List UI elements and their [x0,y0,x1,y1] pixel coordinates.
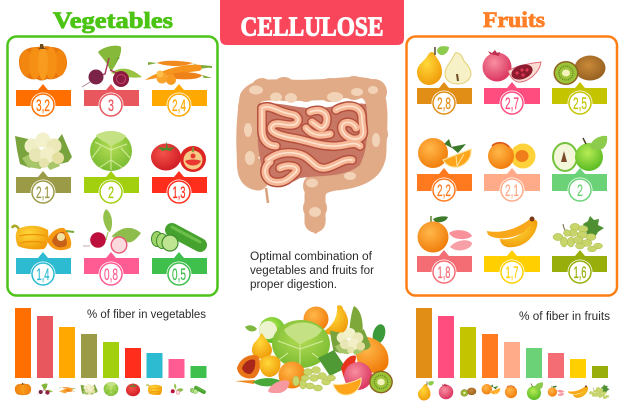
icon: carrot [145,61,213,85]
label: kiwi 2,5: 2,5 [573,94,587,113]
label: pomegranate 2,7 [484,82,540,116]
icon: pumpkin [19,44,67,80]
icon: apple [553,136,607,171]
icon: radish [83,209,141,253]
icon: pomegranate [482,50,541,82]
label: cucumber 0,5 [152,252,207,286]
icon: pear [417,46,471,85]
heading: cellulose: CELLULOSE [240,12,384,42]
bar chart: fruits [416,308,608,378]
label: peach 2,1 [484,168,540,202]
illustration: intestines [237,76,388,234]
text: description [250,251,374,291]
icon: grapes [553,216,604,252]
label: pear 2,8: 2,8 [437,94,451,113]
label: tangerine 1,8 [417,250,472,284]
label: pumpkin 3,2 [16,84,71,118]
icon: orange [418,138,471,168]
label: grapes 1,6 [552,250,607,284]
label: pomegranate 2,7: 2,7 [505,94,519,113]
text: description: Optimal combination of [250,251,373,263]
label: carrot 2,4 [152,84,207,118]
label: tangerine 1,8: 1,8 [438,263,450,282]
icon: kiwi [554,56,606,85]
panel: vegetables [8,36,218,296]
text: fiber in fruits: % of fiber in fruits [519,311,610,323]
label: pepper 1,4: 1,4 [36,265,50,284]
label: carrot 2,4: 2,4 [172,96,186,115]
text: description: vegetables and fruits for [250,265,374,277]
title: vegetables: Vegetables [53,8,173,33]
panel: fruits [406,36,617,296]
text: description: proper digestion. [250,279,337,291]
label: grapes 1,6: 1,6 [574,263,586,282]
label: banana 1,7 [484,250,540,284]
illustration: food pile [235,305,393,395]
bar chart: vegetables [15,308,206,378]
text: fiber in vegetables: % of fiber in vegetables [87,309,206,321]
label: beet 3 [84,84,139,118]
label: cabbage 2 [84,171,139,204]
label: apple 2 [552,168,607,202]
label: cucumber 0,5: 0,5 [172,265,186,284]
label: banana 1,7: 1,7 [506,263,518,282]
label: cabbage 2: 2 [108,183,114,202]
icon: cabbage [90,131,132,171]
icon: cucumber [152,227,200,251]
label: orange 2,2 [417,168,472,202]
label: pumpkin 3,2: 3,2 [36,96,50,115]
label: beet 3: 3 [108,96,114,115]
label: cauliflower 2,1: 2,1 [36,183,50,202]
label: cauliflower 2,1 [16,171,71,204]
icon: tangerine [418,216,472,252]
title: fruits: Fruits [483,7,545,32]
label: radish 0,8: 0,8 [104,265,118,284]
label: pear 2,8 [417,82,472,116]
label: apple 2: 2 [577,181,583,200]
label: radish 0,8 [84,252,139,286]
icon: peach [488,143,536,169]
banner: cellulose [220,0,404,45]
label: tomato 1,3: 1,3 [172,183,186,202]
icon: cauliflower [15,132,72,170]
label: orange 2,2: 2,2 [437,181,451,200]
mini icons: vegetables [15,382,204,396]
icon: banana [487,216,537,247]
label: tomato 1,3 [152,171,207,204]
label: kiwi 2,5 [552,82,607,116]
icon: tomato [151,141,206,172]
label: pepper 1,4 [16,252,71,286]
label: peach 2,1: 2,1 [505,181,519,200]
icon: beet [82,46,142,87]
mini icons: fruits [418,381,610,400]
icon: pepper [12,226,74,250]
